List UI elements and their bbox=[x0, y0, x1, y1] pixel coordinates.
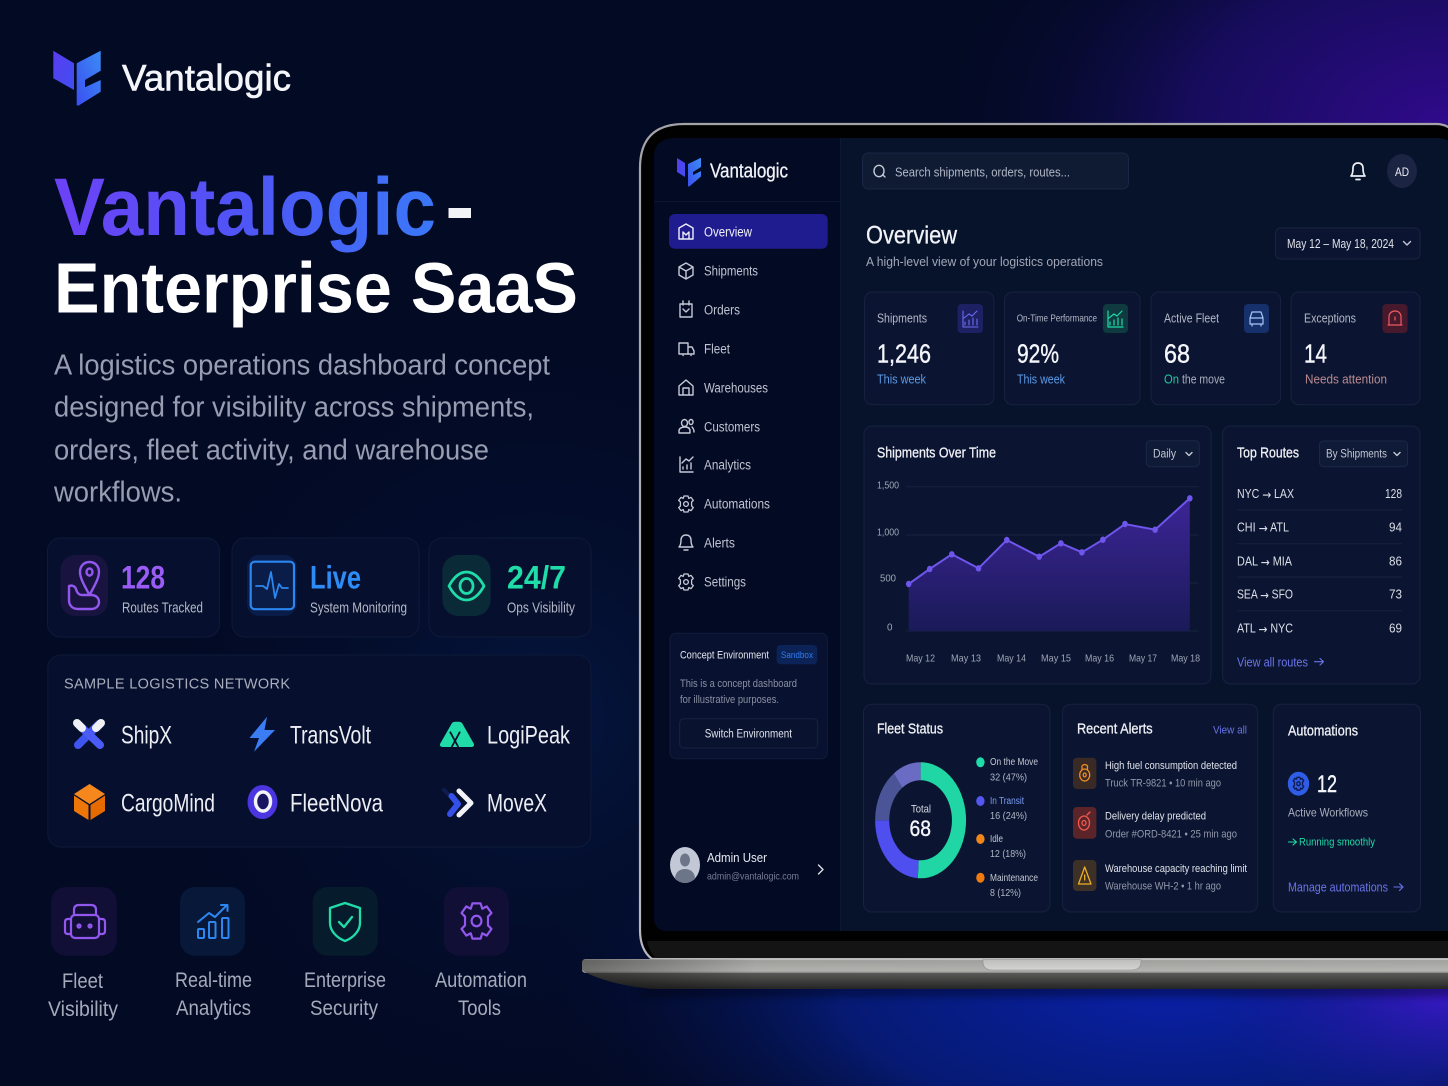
panel: concept environment: for illustrative purposes. bbox=[680, 694, 779, 706]
kpi: on-time performance: This week bbox=[1017, 373, 1066, 387]
icon: workflow gear bbox=[1288, 772, 1309, 796]
feature: enterprise security bbox=[304, 887, 386, 1020]
panel: top routes bbox=[1223, 426, 1420, 684]
legend: Maintenance bbox=[990, 873, 1038, 884]
kpi: on-time performance: 92% bbox=[1017, 339, 1059, 369]
x axis labels: May 18 bbox=[1171, 653, 1200, 665]
stat value: 24/7 bbox=[507, 560, 566, 596]
legend: 16 (24%) bbox=[990, 811, 1027, 822]
alert: warehouse capacity: Warehouse WH-2 • 1 hr ago bbox=[1105, 881, 1221, 893]
page heading: A high-level view of your logistics operations bbox=[866, 254, 1103, 269]
nav: settings: Settings bbox=[704, 575, 746, 590]
kpi: shipments: Shipments bbox=[877, 312, 927, 326]
route rows: DAL → MIA bbox=[1237, 554, 1293, 569]
nav: automations: Automations bbox=[704, 497, 770, 512]
y axis labels bbox=[877, 480, 899, 633]
x axis labels: May 15 bbox=[1041, 653, 1071, 665]
icon: gear bbox=[462, 903, 491, 939]
donut chart: Total bbox=[911, 803, 931, 815]
nav: shipments: Shipments bbox=[704, 264, 758, 279]
logo: CargoMind bbox=[74, 784, 215, 820]
nav: orders: Orders bbox=[704, 303, 740, 318]
icon: route pin bbox=[69, 562, 99, 609]
brand logo bbox=[53, 51, 291, 106]
nav: automations bbox=[679, 496, 770, 512]
headline line 1: Vantalogic bbox=[54, 162, 436, 253]
panel: top routes: Top Routes bbox=[1237, 446, 1299, 462]
admin user: Admin User bbox=[707, 850, 768, 865]
panel: automations: 12 bbox=[1317, 771, 1337, 798]
status text: the move bbox=[1182, 373, 1225, 387]
legend bbox=[976, 757, 1038, 899]
admin user bbox=[670, 847, 823, 883]
panel: shipments over time bbox=[864, 426, 1211, 684]
stat value: 128 bbox=[121, 560, 165, 596]
sidebar logo: Vantalogic bbox=[710, 161, 788, 183]
nav: fleet: Fleet bbox=[704, 342, 730, 357]
running status: Running smoothly bbox=[1299, 837, 1375, 849]
description paragraph: workflows. bbox=[53, 477, 182, 509]
panel: concept environment: This is a concept dashboard bbox=[680, 678, 797, 690]
data points bbox=[906, 495, 1193, 587]
stat card: routes tracked bbox=[48, 538, 220, 637]
laptop base bbox=[582, 959, 1448, 989]
panel: concept environment bbox=[670, 633, 827, 759]
x axis labels: May 13 bbox=[951, 653, 981, 665]
x axis labels: May 12 bbox=[906, 653, 935, 665]
route rows: SEA → SFO bbox=[1237, 587, 1293, 602]
stat value: Live bbox=[310, 560, 361, 596]
legend: 32 (47%) bbox=[990, 772, 1027, 783]
legend: 12 (18%) bbox=[990, 849, 1026, 860]
panel: fleet status bbox=[864, 704, 1050, 912]
logo: ShipX bbox=[77, 722, 172, 750]
feature label bbox=[175, 969, 252, 1020]
legend: In Transit bbox=[990, 796, 1024, 807]
alert: fuel consumption bbox=[1073, 758, 1237, 790]
dropdown: by shipments bbox=[1320, 441, 1408, 467]
panel: automations: Active Workflows bbox=[1288, 806, 1368, 820]
stat label: Routes Tracked bbox=[122, 601, 203, 617]
laptop lid bbox=[640, 124, 1448, 959]
avatar AD: AD bbox=[1395, 165, 1409, 179]
view all routes link: View all routes bbox=[1237, 655, 1308, 669]
feature label: Security bbox=[310, 997, 378, 1020]
stat card: ops visibility bbox=[429, 538, 591, 637]
avatar AD bbox=[1387, 154, 1417, 188]
nav: alerts: Alerts bbox=[704, 536, 735, 551]
y axis labels: 1,000 bbox=[877, 526, 899, 538]
feature label: Analytics bbox=[176, 997, 251, 1020]
x axis labels: May 17 bbox=[1129, 653, 1157, 665]
icon tile bbox=[958, 304, 983, 333]
logo: LogiPeak bbox=[440, 722, 570, 750]
nav: customers: Customers bbox=[704, 420, 760, 435]
stat label: System Monitoring bbox=[310, 601, 407, 617]
x axis labels bbox=[906, 653, 1200, 665]
panel: automations: Automations bbox=[1288, 724, 1358, 740]
logo: LogiPeak: LogiPeak bbox=[487, 722, 570, 750]
alert: delivery delay: Delivery delay predicted bbox=[1105, 811, 1206, 823]
nav: orders bbox=[680, 301, 740, 318]
alert: warehouse capacity bbox=[1073, 860, 1247, 893]
kpi: shipments: This week bbox=[877, 373, 927, 387]
hinge strip bbox=[647, 941, 1448, 958]
data line bbox=[909, 498, 1190, 584]
stat card: live monitoring bbox=[232, 538, 419, 637]
logo: CargoMind: CargoMind bbox=[121, 790, 215, 818]
stat label: Ops Visibility bbox=[507, 601, 576, 617]
page heading bbox=[866, 222, 1103, 269]
nav: overview active: Overview bbox=[704, 225, 752, 240]
description paragraph: designed for visibility across shipments, bbox=[54, 392, 534, 424]
feature label: Visibility bbox=[48, 998, 118, 1021]
feature label: Enterprise bbox=[304, 969, 386, 992]
nav: shipments bbox=[679, 263, 758, 279]
logo: FleetNova bbox=[248, 785, 383, 819]
feature label bbox=[435, 969, 527, 1020]
nav: warehouses bbox=[679, 380, 768, 396]
logo: ShipX: ShipX bbox=[121, 722, 172, 750]
brand name: Vantalogic bbox=[122, 58, 291, 99]
panel heading: SAMPLE LOGISTICS NETWORK bbox=[64, 677, 290, 693]
feature label: Fleet bbox=[62, 970, 103, 993]
laptop notch bbox=[983, 960, 1141, 970]
feature label: Automation bbox=[435, 969, 527, 992]
headline line 2: Enterprise SaaS bbox=[54, 249, 578, 329]
x axis labels: May 16 bbox=[1085, 653, 1114, 665]
donut chart bbox=[882, 771, 959, 869]
description paragraph: A logistics operations dashboard concept bbox=[54, 350, 550, 382]
route rows: 73 bbox=[1389, 588, 1402, 602]
laptop bbox=[582, 124, 1448, 994]
panel: recent alerts: Recent Alerts bbox=[1077, 722, 1153, 738]
y axis labels: 500 bbox=[880, 573, 896, 585]
kpi: on-time performance bbox=[1004, 292, 1140, 405]
headline dash bbox=[448, 208, 471, 218]
donut chart: 68 bbox=[910, 816, 931, 841]
nav: analytics: Analytics bbox=[704, 458, 751, 473]
route rows: ATL → NYC bbox=[1237, 621, 1293, 636]
icon tile bbox=[1382, 304, 1408, 333]
feature: automation tools bbox=[435, 887, 527, 1020]
legend: 8 (12%) bbox=[990, 888, 1021, 899]
logo: FleetNova: FleetNova bbox=[290, 790, 383, 818]
date range picker bbox=[1276, 228, 1420, 259]
sandbox badge: Sandbox bbox=[781, 650, 813, 661]
feature label: Tools bbox=[458, 997, 501, 1020]
date range picker: May 12 – May 18, 2024 bbox=[1287, 237, 1394, 251]
route rows: NYC → LAX bbox=[1237, 486, 1295, 501]
route rows: 94 bbox=[1389, 521, 1402, 535]
kpi: exceptions bbox=[1291, 292, 1420, 405]
description paragraph bbox=[53, 350, 550, 509]
manage automations link: Manage automations bbox=[1288, 881, 1388, 895]
sidebar logo bbox=[677, 158, 788, 187]
alert: fuel consumption: Truck TR-9821 • 10 min ago bbox=[1105, 778, 1221, 790]
top bar bbox=[862, 153, 1417, 189]
route rows: 69 bbox=[1389, 621, 1402, 635]
headline bbox=[54, 162, 578, 329]
logo: TransVolt bbox=[250, 717, 371, 752]
alert: delivery delay bbox=[1073, 807, 1237, 841]
icon: growth chart bbox=[198, 905, 228, 938]
x axis labels: May 14 bbox=[997, 653, 1026, 665]
laptop shadow bbox=[640, 986, 1448, 994]
nav: customers bbox=[679, 420, 760, 435]
route rows: CHI → ATL bbox=[1237, 520, 1289, 535]
logo: MoveX: MoveX bbox=[487, 790, 547, 818]
feature label: Real-time bbox=[175, 969, 252, 992]
panel: recent alerts bbox=[1062, 704, 1258, 912]
alert: warehouse capacity: Warehouse capacity reaching limit bbox=[1105, 863, 1247, 875]
kpi: active fleet: Active Fleet bbox=[1164, 312, 1219, 326]
feature label bbox=[304, 969, 386, 1020]
icon: pulse monitor bbox=[251, 562, 294, 609]
legend: Idle bbox=[990, 834, 1003, 845]
panel: fleet status: Fleet Status bbox=[877, 722, 943, 738]
search box: Search shipments, orders, routes... bbox=[895, 165, 1070, 180]
dropdown: daily: Daily bbox=[1153, 449, 1176, 461]
status text bbox=[1164, 374, 1224, 384]
feature label bbox=[48, 970, 118, 1021]
kpi: active fleet bbox=[1151, 292, 1281, 405]
route rows bbox=[1237, 486, 1402, 636]
kpi: exceptions: 14 bbox=[1304, 339, 1327, 369]
nav: settings bbox=[679, 574, 746, 590]
dropdown: daily bbox=[1146, 441, 1199, 467]
feature: fleet visibility bbox=[48, 887, 118, 1021]
nav: fleet bbox=[679, 342, 730, 357]
icon tile bbox=[1103, 304, 1128, 333]
nav: analytics bbox=[680, 457, 751, 473]
alert: fuel consumption: High fuel consumption detected bbox=[1105, 760, 1237, 772]
area fill bbox=[909, 498, 1190, 631]
kpi: shipments: 1,246 bbox=[877, 339, 931, 369]
panel: sample logistics network bbox=[48, 655, 591, 847]
legend: On the Move bbox=[990, 757, 1038, 768]
panel: shipments over time: Shipments Over Time bbox=[877, 445, 996, 461]
nav: warehouses: Warehouses bbox=[704, 381, 768, 396]
panel: sidebar bbox=[654, 138, 841, 931]
status text: On bbox=[1164, 373, 1179, 387]
logo: MoveX bbox=[444, 790, 547, 818]
panel: concept environment: Concept Environment bbox=[680, 650, 769, 662]
line chart bbox=[877, 480, 1200, 665]
switch environment button: Switch Environment bbox=[705, 728, 793, 740]
kpi: shipments bbox=[864, 292, 994, 405]
icon: shield bbox=[330, 903, 360, 941]
admin user: admin@vantalogic.com bbox=[707, 871, 799, 883]
y axis labels: 1,500 bbox=[877, 480, 899, 492]
icon: bell bbox=[1351, 163, 1365, 180]
search box bbox=[862, 153, 1128, 189]
switch environment button bbox=[680, 719, 818, 748]
kpi: active fleet: 68 bbox=[1164, 339, 1190, 369]
dropdown: by shipments: By Shipments bbox=[1326, 449, 1387, 461]
logo: TransVolt: TransVolt bbox=[290, 722, 371, 750]
description paragraph: orders, fleet activity, and warehouse bbox=[54, 435, 489, 467]
sandbox badge bbox=[777, 645, 817, 664]
dashboard screen bbox=[654, 138, 1448, 931]
panel: recent alerts: View all bbox=[1213, 725, 1247, 737]
alert: delivery delay: Order #ORD-8421 • 25 min ago bbox=[1105, 829, 1237, 841]
nav: alerts bbox=[679, 535, 735, 551]
icon: brand mark bbox=[53, 51, 101, 106]
kpi: on-time performance: On-Time Performance bbox=[1017, 313, 1097, 325]
nav: overview active bbox=[669, 214, 828, 249]
kpi: exceptions: Exceptions bbox=[1304, 312, 1356, 326]
y axis labels: 0 bbox=[887, 621, 893, 633]
feature: real-time analytics bbox=[175, 887, 252, 1020]
icon tile bbox=[1244, 304, 1269, 333]
kpi: exceptions: Needs attention bbox=[1305, 373, 1387, 387]
route rows: 86 bbox=[1389, 554, 1402, 568]
page heading: Overview bbox=[866, 222, 958, 250]
panel: automations bbox=[1273, 704, 1420, 912]
icon: robot bbox=[65, 905, 105, 938]
route rows: 128 bbox=[1385, 487, 1402, 501]
icon: eye bbox=[449, 572, 484, 600]
